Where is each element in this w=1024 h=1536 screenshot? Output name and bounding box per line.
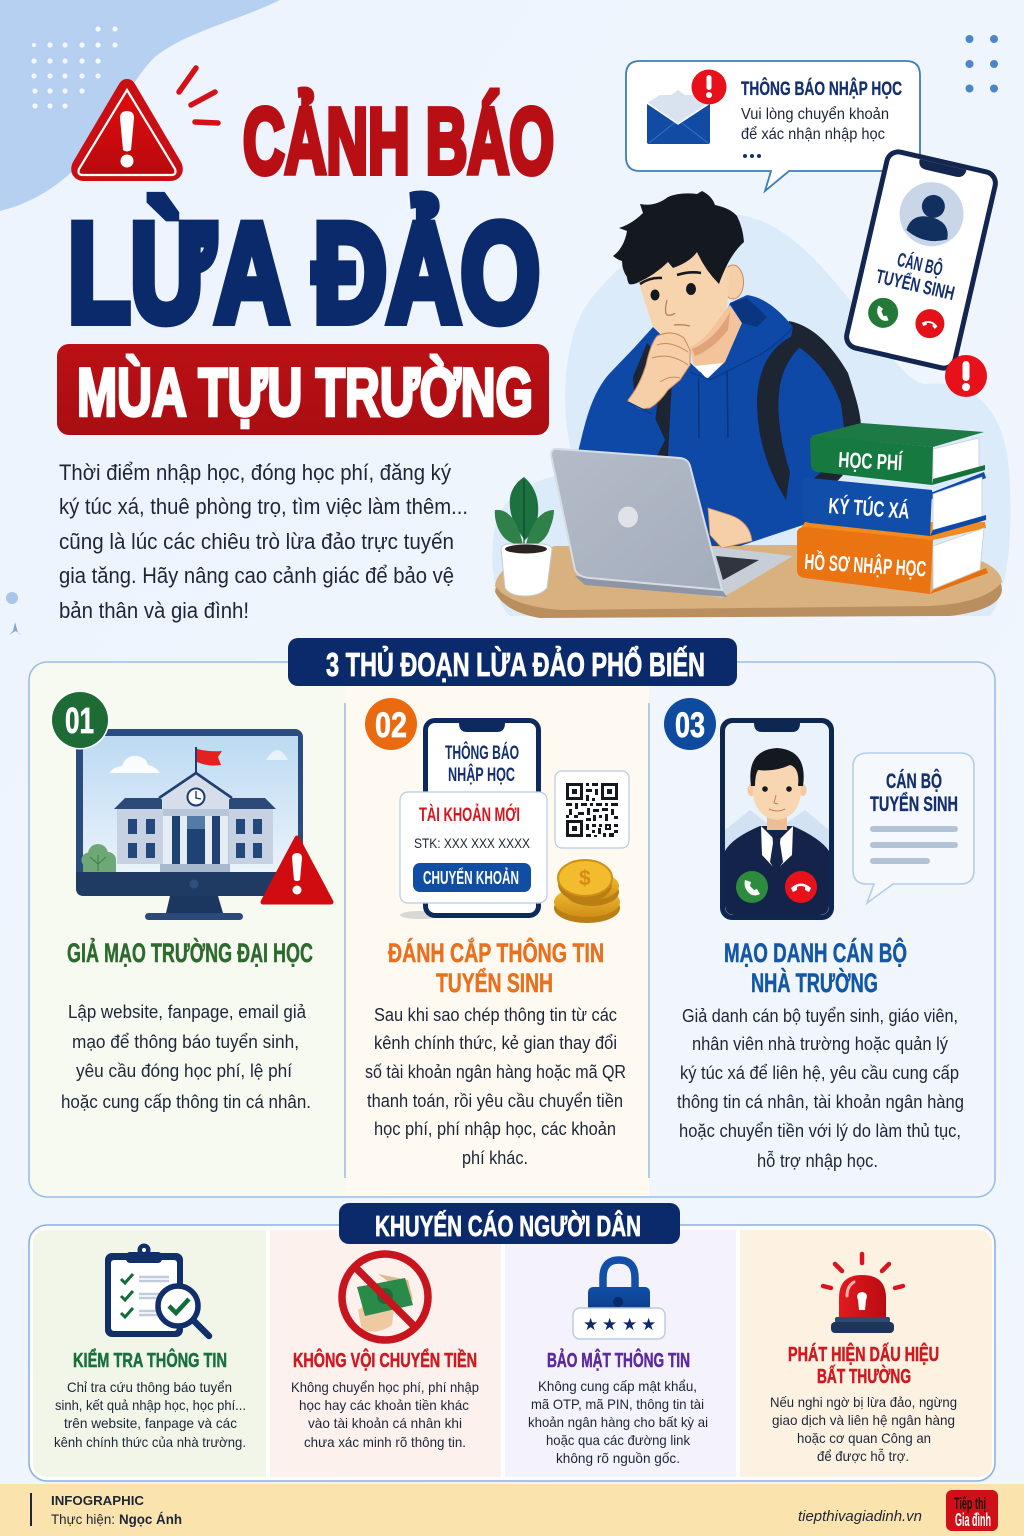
body text 2: kênh chính thức, kẻ gian thay đổi	[374, 1033, 617, 1053]
dots top-right	[966, 35, 998, 92]
heading 3	[724, 937, 907, 998]
avatar	[893, 176, 970, 253]
body text 3: hoặc chuyển tiền với lý do làm thủ tục,	[679, 1121, 961, 1141]
icon: envelope	[647, 90, 710, 144]
credit text: Ngọc Ánh	[119, 1511, 182, 1527]
card 3 heading: BẢO MẬT THÔNG TIN	[547, 1348, 690, 1372]
backpack	[770, 321, 866, 500]
badge: 02: 02	[375, 706, 407, 745]
heading 1: GIẢ MẠO TRƯỜNG ĐẠI HỌC	[67, 936, 313, 968]
book: học phí: HỌC PHÍ	[838, 447, 904, 475]
notification speech bubble	[626, 61, 920, 191]
column 2: stolen admission information	[365, 698, 629, 1168]
card 2 text: học hay các khoản tiền khác	[299, 1397, 469, 1413]
icon: phone with transfer request	[400, 718, 547, 919]
body text 3: Giả danh cán bộ tuyển sinh, giáo viên,	[682, 1006, 958, 1026]
column 3: impersonating school staff	[664, 698, 974, 1171]
card 4 text: hoặc cơ quan Công an	[797, 1430, 931, 1446]
drawstrings	[698, 371, 728, 438]
tree	[82, 844, 116, 872]
book: ký túc xá	[803, 472, 986, 536]
badge: 01	[50, 690, 110, 750]
badge: 02	[365, 698, 417, 750]
body text 3: nhân viên nhà trường hoặc quản lý	[692, 1034, 948, 1054]
heading 2	[388, 937, 604, 998]
bubble text	[741, 106, 889, 143]
column 1 background	[30, 663, 345, 1196]
badge: 03	[664, 698, 716, 750]
speech bubble: cán bộ tuyển sinh: CÁN BỘ	[886, 769, 942, 793]
new account card: CHUYỂN KHOẢN	[423, 867, 519, 888]
card 3 text: mã OTP, mã PIN, thông tin tài	[531, 1396, 704, 1412]
ellipsis dots	[743, 154, 761, 158]
card 3 background	[505, 1230, 736, 1477]
intro paragraph: cũng là lúc các chiêu trò lừa đảo trực tuyến	[59, 529, 454, 554]
title banner: MÙA TỰU TRƯỜNG: MÙA TỰU TRƯỜNG	[77, 354, 533, 430]
bubble heading: THÔNG BÁO NHẬP HỌC	[741, 76, 902, 100]
card 2 text: Không chuyển học phí, phí nhập	[291, 1379, 479, 1395]
logo: Tiếp thị	[954, 1494, 986, 1513]
section heading pill: khuyến cáo	[339, 1203, 680, 1244]
flag	[195, 747, 222, 774]
left backpack strap	[633, 343, 655, 398]
decorative blob top-left	[0, 0, 280, 211]
speech bubble: cán bộ tuyển sinh: TUYỂN SINH	[870, 793, 958, 816]
panel: recommendations	[29, 1225, 995, 1481]
card 1 heading: KIỂM TRA THÔNG TIN	[73, 1348, 227, 1372]
book: hồ sơ nhập học: HỒ SƠ NHẬP HỌC	[804, 549, 927, 581]
section heading pill: 3 thủ đoạn	[288, 638, 737, 686]
card 3 text: Không cung cấp mật khẩu,	[538, 1378, 697, 1394]
hood folds	[730, 298, 767, 327]
card 3 text: khoản ngân hàng cho bất kỳ ai	[528, 1414, 708, 1430]
hair	[613, 191, 744, 284]
section heading pill: 3 thủ đoạn: 3 THỦ ĐOẠN LỪA ĐẢO PHỔ BIẾN	[326, 646, 705, 683]
book: hồ sơ nhập học	[797, 522, 988, 594]
body text 3: ký túc xá để liên hệ, yêu cầu cung cấp	[680, 1063, 959, 1083]
intro paragraph: ký túc xá, thuê phòng trọ, tìm việc làm thêm...	[59, 494, 468, 519]
card 4 heading	[788, 1342, 939, 1388]
call buttons	[736, 871, 817, 903]
card 3 text	[528, 1378, 708, 1466]
panel: scam methods	[29, 662, 995, 1197]
man in suit	[725, 748, 829, 915]
card 4 text: giao dịch và liên hệ ngân hàng	[772, 1412, 955, 1428]
hoodie	[578, 295, 847, 546]
student illustration	[578, 191, 866, 548]
body text 2: thanh toán, rồi yêu cầu chuyển tiền	[367, 1091, 623, 1111]
icon: phone with transfer request: THÔNG BÁO	[445, 742, 519, 764]
new account card: STK: XXX XXX XXXX	[414, 835, 531, 851]
card 3 text: không rõ nguồn gốc.	[556, 1450, 680, 1466]
typing hand	[708, 508, 752, 548]
body text 1: hoặc cung cấp thông tin cá nhân.	[61, 1092, 311, 1112]
icon: monitor with school	[76, 729, 303, 920]
website: tiepthivagiadinh.vn	[798, 1508, 922, 1525]
intro paragraph: gia tăng. Hãy nâng cao cảnh giác để bảo vệ	[59, 563, 454, 588]
card 4 text: để được hỗ trợ.	[817, 1448, 909, 1464]
card 1 text	[54, 1379, 246, 1450]
body text 2: phí khác.	[462, 1148, 528, 1168]
thinking hand	[628, 333, 690, 410]
card 4 heading: BẤT THƯỜNG	[817, 1364, 911, 1388]
illustration background blob	[492, 214, 1011, 616]
heading 2: TUYỂN SINH	[436, 967, 553, 998]
card 1 text: sinh, kết quả nhập học, học phí...	[55, 1397, 246, 1413]
credit text: INFOGRAPHIC	[51, 1493, 145, 1508]
body text 1: yêu cầu đóng học phí, lệ phí	[76, 1061, 292, 1081]
icon: gold coins: $	[579, 867, 591, 890]
body text 2: số tài khoản ngân hàng hoặc mã QR	[365, 1062, 626, 1082]
card 1 background	[33, 1230, 266, 1477]
tilted phone call	[841, 147, 1001, 397]
speech bubble: cán bộ tuyển sinh	[853, 753, 974, 903]
column 3 background	[649, 663, 994, 1196]
intro paragraph	[59, 460, 468, 623]
face	[637, 235, 730, 347]
credit text	[51, 1493, 182, 1527]
icon: gold coins	[554, 860, 620, 923]
icon: red alert badge	[692, 70, 726, 104]
body text 2: học phí, phí nhập học, các khoản	[374, 1119, 616, 1139]
logo	[946, 1490, 998, 1531]
credit text: Thực hiện:	[51, 1511, 115, 1527]
card 2 text: chưa xác minh rõ thông tin.	[304, 1434, 466, 1450]
potted plant	[495, 477, 554, 596]
heading 3: MẠO DANH CÁN BỘ	[724, 937, 907, 968]
bubble text: để xác nhận nhập học	[741, 126, 885, 143]
new account card	[400, 792, 547, 903]
icon: padlock with password: ★	[622, 1315, 637, 1334]
body text 3: thông tin cá nhân, tài khoản ngân hàng	[677, 1092, 964, 1112]
new account card: TÀI KHOẢN MỚI	[419, 804, 520, 826]
icon: siren	[823, 1254, 903, 1333]
book: ký túc xá: KÝ TÚC XÁ	[828, 493, 910, 524]
body text 1: Lập website, fanpage, email giả	[68, 1002, 307, 1022]
icon: phone with transfer request: NHẬP HỌC	[448, 764, 515, 786]
footer	[0, 1484, 1024, 1536]
neck	[690, 305, 742, 378]
card 4 text	[770, 1394, 957, 1464]
card 4 background	[740, 1230, 992, 1477]
card 4: detect anomalies	[770, 1254, 957, 1464]
badge: 01: 01	[65, 700, 94, 741]
icon: QR code card	[555, 771, 629, 848]
icon: warning triangle with rays	[71, 68, 218, 181]
card 4 text: Nếu nghi ngờ bị lừa đảo, ngừng	[770, 1394, 957, 1410]
card 1 text: Chỉ tra cứu thông báo tuyển	[67, 1379, 232, 1395]
card 1: check information	[54, 1244, 246, 1450]
badge: 03: 03	[675, 706, 705, 745]
title: LỪA ĐẢO: LỪA ĐẢO	[68, 194, 540, 351]
laptop logo	[618, 506, 638, 528]
card 1 text: kênh chính thức của nhà trường.	[54, 1434, 246, 1450]
tee collar	[695, 363, 723, 379]
section heading pill: khuyến cáo: KHUYẾN CÁO NGƯỜI DÂN	[375, 1209, 641, 1243]
heading 3: NHÀ TRƯỜNG	[751, 967, 878, 998]
icon: padlock with password: ★	[602, 1315, 617, 1334]
body text 1	[61, 1002, 311, 1112]
icon: clipboard with magnifier	[105, 1244, 209, 1337]
school building	[114, 773, 276, 872]
tilted phone call: TUYỂN SINH	[874, 265, 957, 305]
icon: padlock with password: ★	[641, 1315, 656, 1334]
column 2 background	[345, 663, 649, 1196]
stack of books	[797, 423, 988, 594]
cloud	[109, 756, 160, 773]
icon: video call phone	[720, 718, 834, 920]
icon: padlock with password	[573, 1260, 665, 1339]
body text 2: Sau khi sao chép thông tin từ các	[374, 1005, 617, 1025]
icon: alert badge on phone	[945, 355, 987, 397]
icon: no money transfer sign	[342, 1254, 428, 1340]
card 3: secure information	[528, 1260, 708, 1466]
small circle and plane decoration left	[6, 592, 22, 635]
icon: red warning triangle	[263, 838, 331, 902]
arm sleeve	[578, 402, 665, 460]
card 2 background	[270, 1230, 501, 1477]
body text 1: mạo để thông báo tuyển sinh,	[72, 1032, 299, 1052]
card 2: do not rush to transfer	[291, 1254, 479, 1450]
body text 3: hỗ trợ nhập học.	[757, 1150, 878, 1171]
card 4 heading: PHÁT HIỆN DẤU HIỆU	[788, 1342, 939, 1366]
card 3 text: hoặc qua các đường link	[546, 1432, 691, 1448]
bubble text: Vui lòng chuyển khoản	[741, 106, 889, 123]
intro paragraph: bản thân và gia đình!	[59, 598, 249, 623]
wooden table	[495, 545, 1002, 618]
heading 2: ĐÁNH CẮP THÔNG TIN	[388, 937, 604, 968]
ear	[722, 265, 744, 299]
laptop	[551, 449, 793, 598]
title: CẢNH BÁO: CẢNH BÁO	[243, 89, 554, 193]
dot grid top-left	[31, 26, 118, 109]
card 2 heading: KHÔNG VỘI CHUYỂN TIỀN	[293, 1348, 477, 1372]
body text 3	[677, 1006, 964, 1171]
eyes and brows	[640, 272, 701, 326]
intro paragraph: Thời điểm nhập học, đóng học phí, đăng ký	[59, 460, 451, 485]
right backpack strap	[757, 335, 810, 500]
card 2 text: vào tài khoản cá nhân khi	[308, 1415, 462, 1431]
answer and decline buttons	[865, 295, 947, 342]
title banner: MÙA TỰU TRƯỜNG	[57, 344, 549, 435]
body text 2	[365, 1005, 626, 1168]
icon: padlock with password: ★	[583, 1315, 598, 1334]
card 1 text: trên website, fanpage và các	[64, 1415, 237, 1431]
book: học phí	[810, 423, 985, 485]
column 1: fake university	[50, 690, 331, 1112]
caller name: CÁN BỘ	[895, 247, 945, 281]
card 2 text	[291, 1379, 479, 1450]
